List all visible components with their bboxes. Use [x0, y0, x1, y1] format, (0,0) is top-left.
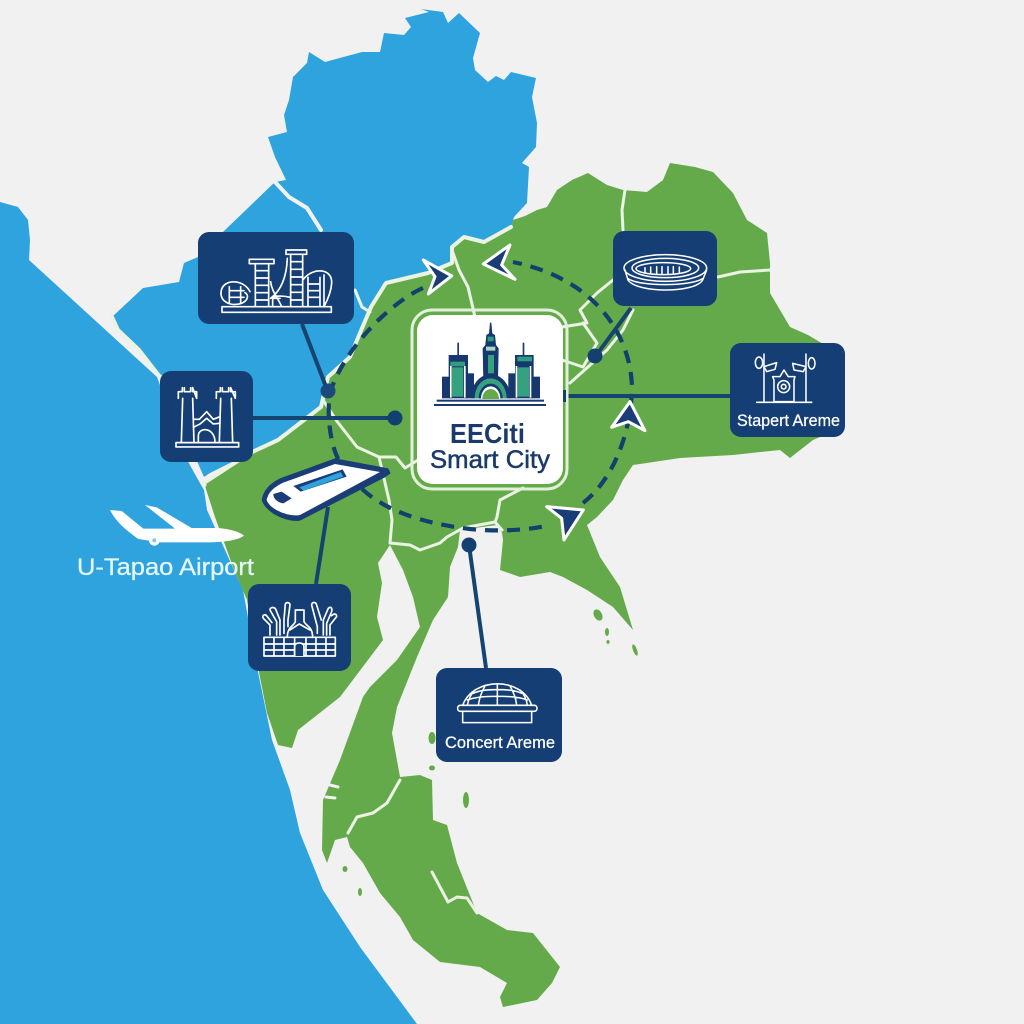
panel: exhibition hall: [248, 584, 351, 671]
icon: airplane: [110, 505, 244, 546]
icon: dome: [458, 684, 537, 723]
blue northern region: [112, 9, 537, 477]
panel: Concert Areme: [436, 668, 562, 762]
label: U-Tapao Airport: U-Tapao Airport: [77, 554, 254, 581]
label: Stapert Areme: Stapert Areme: [737, 411, 840, 430]
small islands: [342, 608, 639, 896]
central panel: EECiti Smart City: [412, 310, 567, 489]
region borders: [112, 182, 770, 913]
icon: hall with spires: [263, 602, 337, 656]
title: EECiti: EECiti: [450, 418, 525, 449]
icon: twin tower gate: [176, 388, 239, 447]
icon: stadium bowl: [624, 255, 707, 290]
panel: stadium: [613, 231, 717, 306]
icon: roller coaster towers: [221, 250, 332, 312]
icon: train: [262, 458, 391, 521]
dashed ring route: [329, 262, 632, 530]
panel: Stapert Areme: [730, 343, 845, 437]
connector lines and dots: [253, 308, 730, 668]
panel: theme park: [198, 232, 354, 324]
label: Concert Areme: Concert Areme: [445, 733, 555, 752]
direction arrows: [423, 245, 645, 540]
subtitle: Smart City: Smart City: [430, 446, 551, 474]
green mainland and peninsula: [204, 163, 825, 1007]
icon: monument with banners: [755, 354, 815, 402]
panel: castle gate: [160, 371, 253, 462]
icon: city skyline: [434, 323, 546, 406]
sea on the west: [0, 202, 417, 1024]
